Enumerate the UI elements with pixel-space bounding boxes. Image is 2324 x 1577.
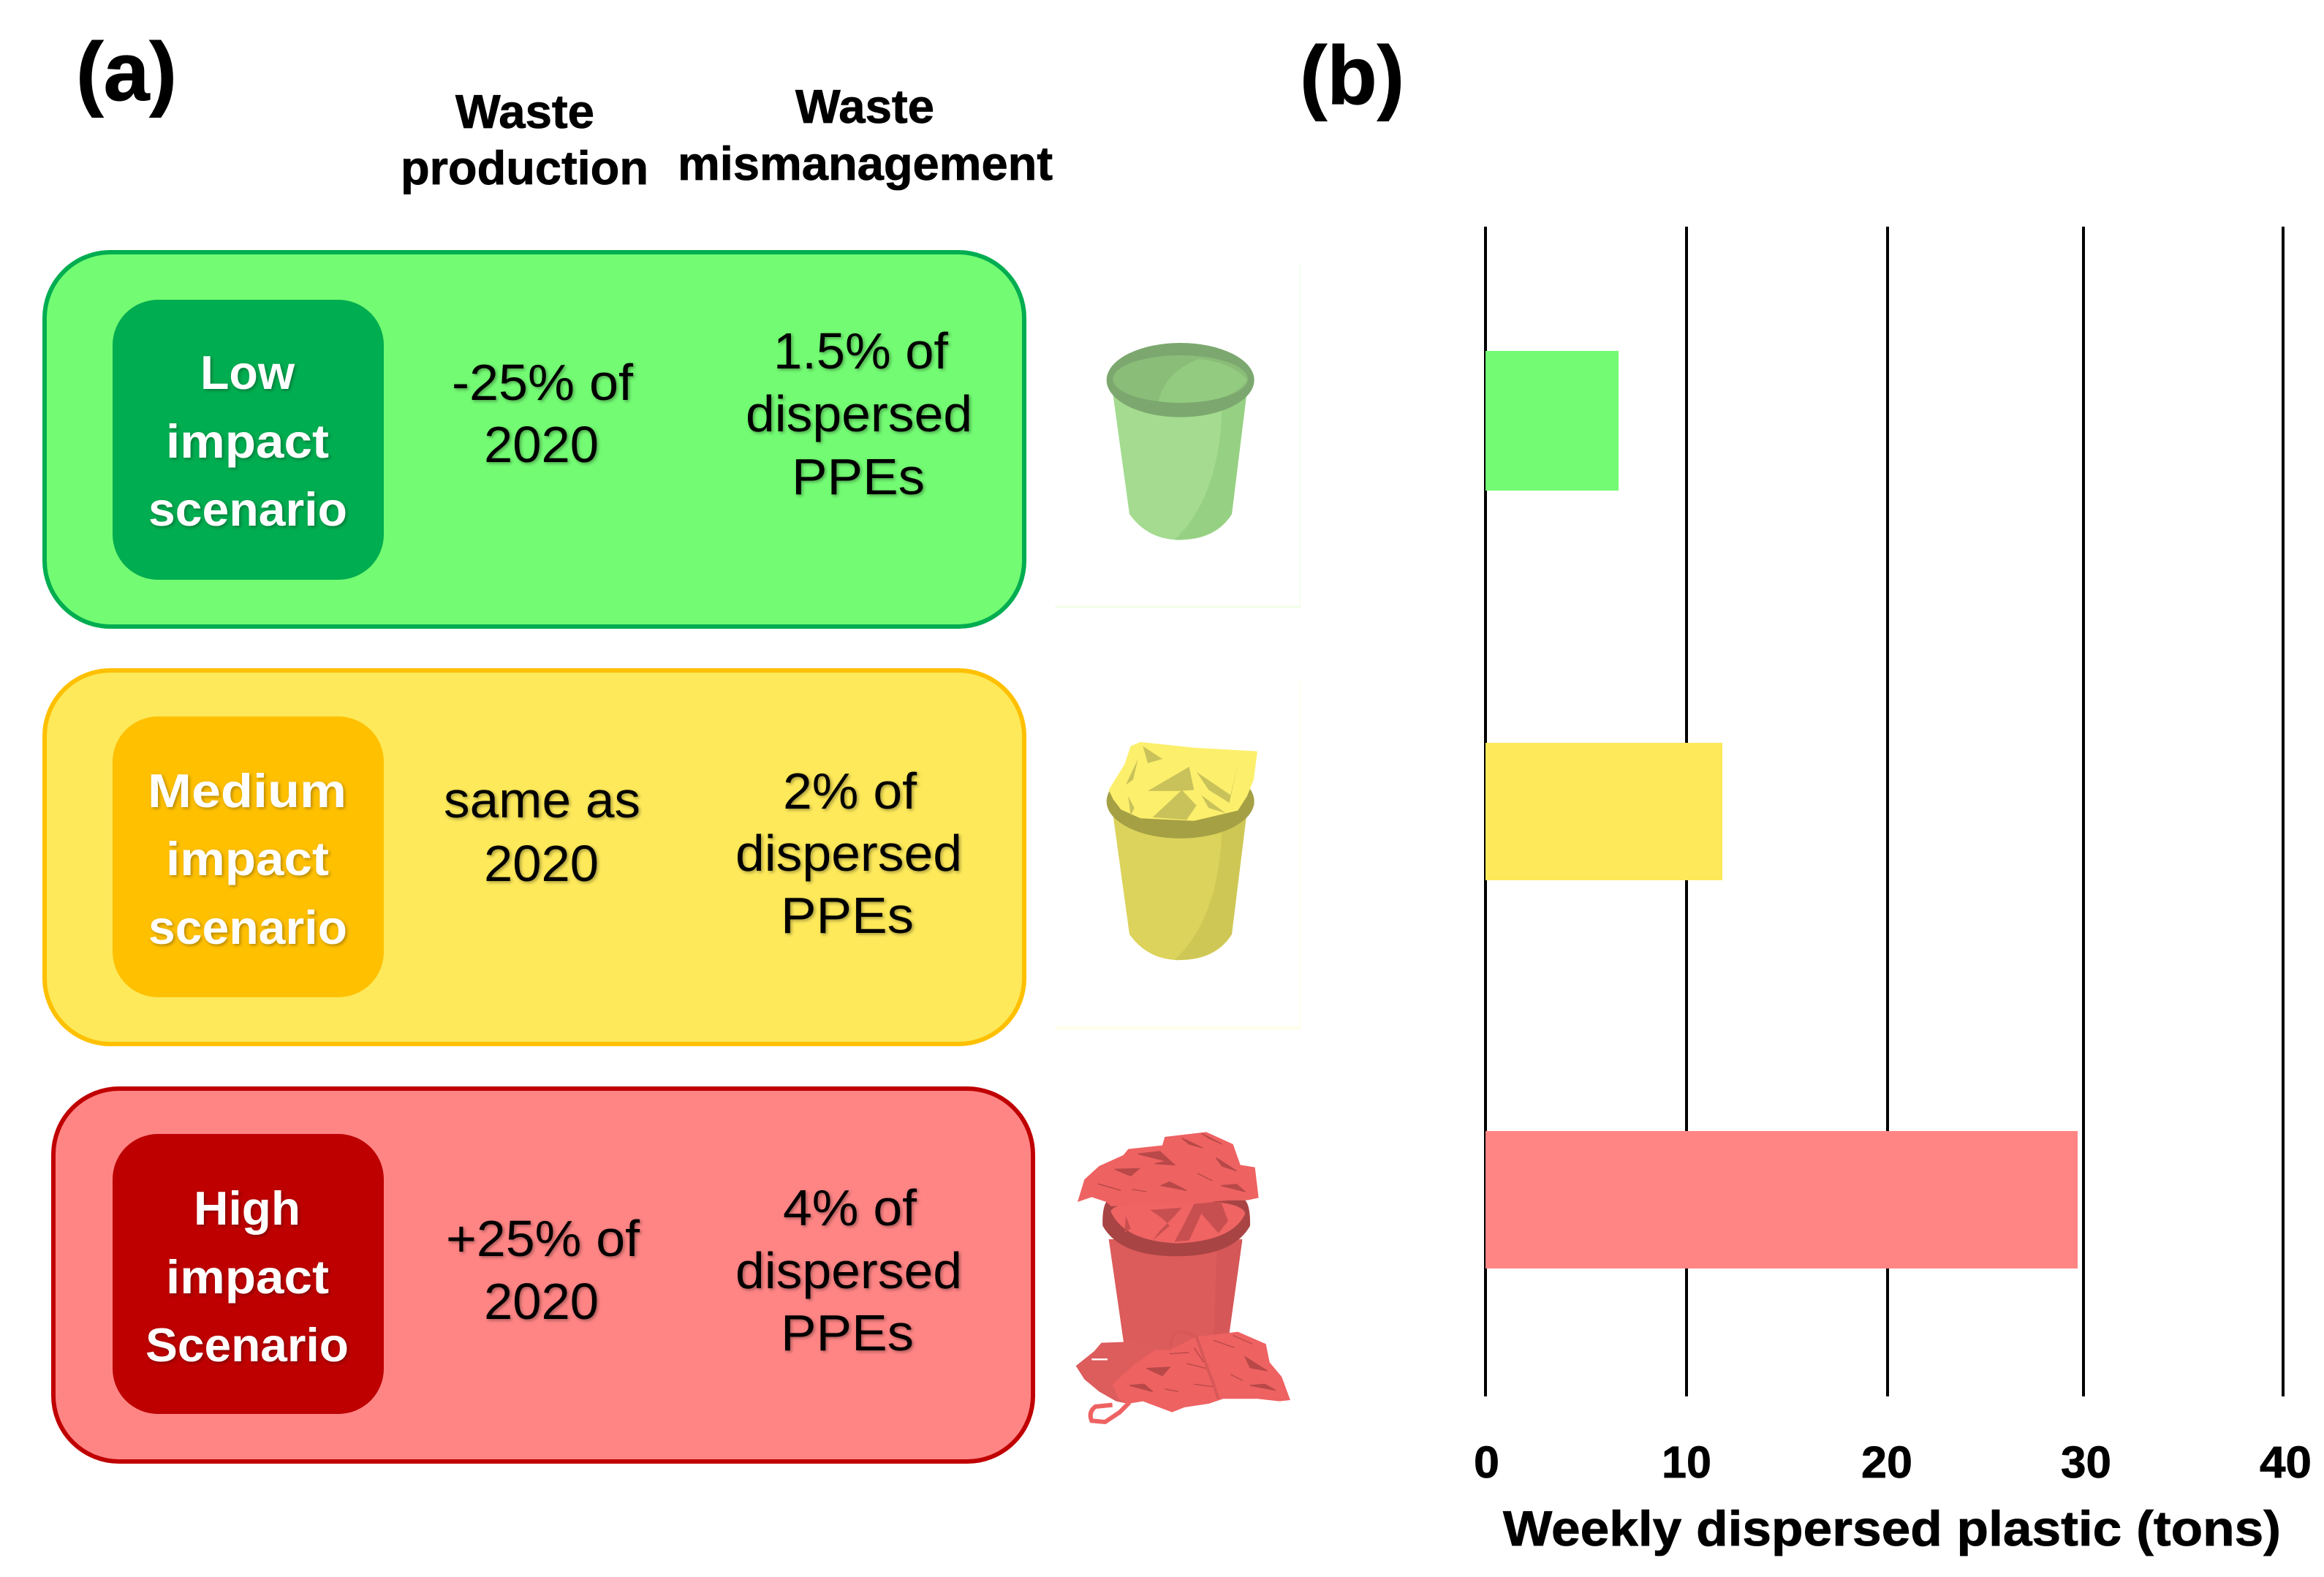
column heading: waste production — [401, 85, 648, 194]
text: waste production low: 2020 — [484, 416, 599, 473]
badge: low impact scenario: Low — [200, 346, 295, 399]
bar: high scenario — [1485, 1131, 2078, 1268]
icon: overflowing red bin with masks — [1076, 1132, 1290, 1422]
column heading: waste mismanagement — [678, 80, 1053, 190]
text: mismanagement low: 1.5% of — [773, 322, 949, 379]
axis tick labels: 10 — [1662, 1437, 1711, 1487]
column heading: waste mismanagement: Waste — [795, 80, 934, 133]
text: mismanagement high: 4% of — [783, 1179, 917, 1236]
text: mismanagement high: PPEs — [781, 1304, 914, 1361]
badge: medium impact scenario: impact — [166, 832, 329, 885]
text: waste production medium: 2020 — [484, 835, 599, 892]
icon: empty green bin — [1055, 264, 1300, 607]
badge: medium impact scenario: Medium — [148, 764, 347, 817]
text: mismanagement medium — [735, 763, 962, 944]
text: mismanagement low: PPEs — [792, 448, 925, 505]
text: mismanagement medium: PPEs — [781, 887, 914, 944]
text: waste production high: 2020 — [484, 1273, 599, 1330]
badge: high impact scenario: impact — [166, 1250, 329, 1304]
axis tick labels: 40 — [2260, 1437, 2312, 1487]
panel: low impact scenario — [45, 252, 1024, 627]
text: mismanagement high: dispersed — [735, 1242, 962, 1299]
text: waste production high — [446, 1210, 640, 1330]
text: waste production low: -25% of — [452, 354, 634, 411]
text: mismanagement medium: dispersed — [735, 825, 962, 882]
text: waste production medium: same as — [444, 771, 640, 828]
text: waste production medium — [444, 771, 640, 892]
column heading: waste mismanagement: mismanagement — [678, 137, 1053, 190]
axis title: Weekly dispersed plastic (tons) — [1503, 1501, 2281, 1557]
axis tick labels: 20 — [1861, 1437, 1912, 1487]
text: waste production low — [452, 354, 634, 473]
badge: medium impact scenario — [113, 716, 384, 997]
panel label (a): (a) — [76, 26, 177, 118]
icon: half-full yellow bin — [1055, 681, 1300, 1028]
bar chart: weekly dispersed plastic — [1474, 227, 2312, 1557]
axis tick labels: 30 — [2061, 1437, 2111, 1487]
text: waste production high: +25% of — [446, 1210, 640, 1267]
axis tick labels — [1474, 1437, 2312, 1487]
column heading: waste production: Waste — [455, 85, 594, 138]
text: mismanagement medium: 2% of — [783, 763, 917, 820]
bar: medium scenario — [1485, 743, 1722, 880]
badge: low impact scenario: scenario — [148, 483, 347, 536]
panel: high impact scenario — [53, 1089, 1033, 1461]
badge: high impact scenario — [113, 1134, 384, 1414]
panel label (b): (b) — [1300, 29, 1404, 121]
badge: medium impact scenario: scenario — [148, 901, 347, 954]
text: mismanagement low — [746, 322, 972, 505]
text: mismanagement low: dispersed — [746, 385, 972, 442]
column heading: waste production: production — [401, 141, 648, 194]
axis tick labels: 0 — [1474, 1437, 1499, 1487]
badge: high impact scenario: Scenario — [145, 1318, 349, 1372]
text: mismanagement high — [735, 1179, 962, 1361]
bar: low scenario — [1485, 351, 1619, 491]
panel: medium impact scenario — [45, 670, 1024, 1044]
badge: high impact scenario: High — [194, 1181, 300, 1235]
badge: low impact scenario — [113, 300, 384, 580]
badge: low impact scenario: impact — [166, 415, 329, 468]
